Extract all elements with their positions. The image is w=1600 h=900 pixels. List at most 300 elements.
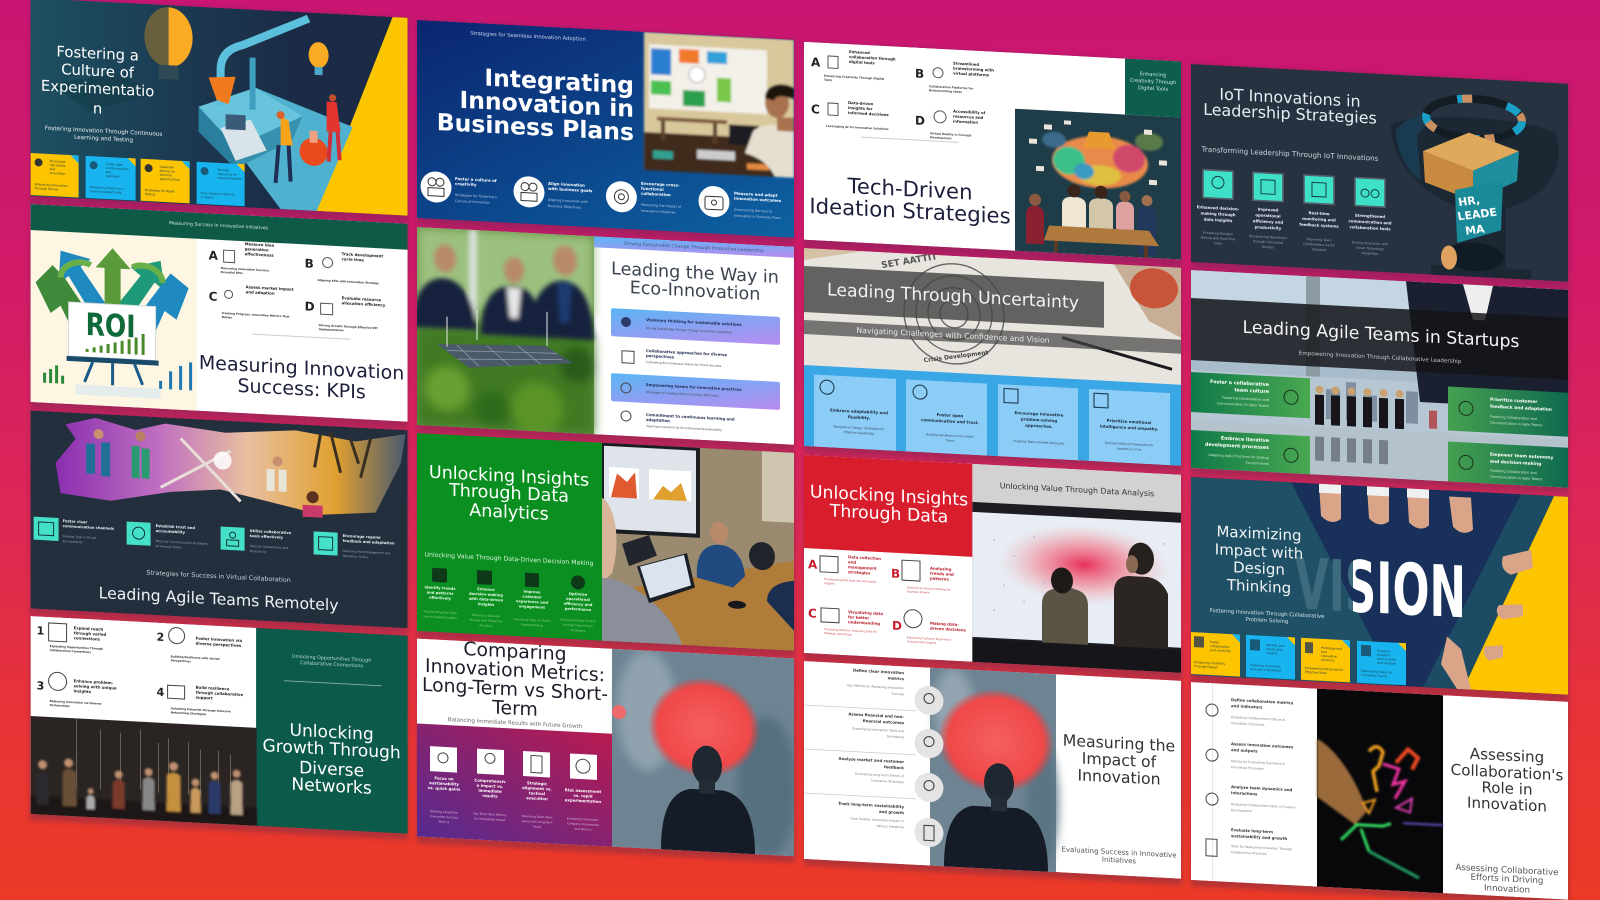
KPI grid: Evaluate resource [342, 295, 382, 302]
blue section with cards: communication and trust. [921, 417, 980, 425]
items grid: Tools [824, 78, 833, 82]
slide: Maximizing Impact with Design Thinking [1191, 477, 1568, 695]
feature cards: Encourage [50, 159, 66, 164]
icon columns: Strategies [571, 628, 586, 633]
icons row: with business goals [548, 186, 593, 193]
title band: Empowering Innovation Through Collaborative Leadership [1299, 351, 1462, 365]
feature cards: risk-taking [50, 163, 66, 168]
list cards: Empowering teams for innovative practices [646, 382, 742, 392]
numbered items: through varied [74, 630, 107, 637]
items grid: informed decisions [848, 110, 889, 117]
KPI grid: B [305, 256, 314, 271]
feature cards: and mindset [1377, 661, 1397, 666]
numbered items: Networking Strategies [171, 710, 207, 716]
list of metrics: metrics [888, 675, 905, 681]
icon row: productivity [1255, 224, 1282, 231]
comparison columns: Risk assessment [565, 787, 601, 794]
items grid [811, 47, 994, 145]
data topics: trends and [930, 571, 954, 577]
data topics: Business Growth [907, 589, 930, 595]
comparison columns: Company Frameworks [567, 821, 600, 827]
comparison columns: results [482, 793, 498, 799]
vertical list: Tools for Measuring Innovation Through [1230, 844, 1292, 851]
feature cards: Prototype and [1321, 646, 1342, 651]
blue section with cards: Prioritize emotional [1107, 418, 1152, 425]
list of metrics: and growth [879, 809, 904, 815]
comparison columns: sustainability [429, 780, 459, 787]
icon tiles: Foster clear [63, 519, 87, 524]
green callouts: Environments [1246, 461, 1269, 466]
title: IoT Innovations in [1219, 84, 1361, 111]
icon columns: Optimize [569, 592, 588, 597]
title: Impact of [1082, 749, 1157, 771]
blue section with cards: Times [945, 438, 955, 443]
data topics: Analyzing [930, 566, 952, 572]
title band: Leading Agile Teams in Startups [1243, 318, 1519, 352]
numbered items: Expanding Opportunities Through [50, 644, 103, 651]
icon row: Enhanced decision- [1197, 204, 1240, 212]
comparison columns: alignment vs. [522, 785, 552, 792]
icon tiles: for Remote Teams [156, 544, 182, 549]
title: Leading the Way in [611, 259, 779, 288]
title: Innovation in [459, 86, 634, 123]
list of metrics: Quantifying Innovation: Tools and [852, 727, 904, 733]
photo: neon shapes on black [1317, 689, 1443, 893]
numbered items: Expand reach [74, 625, 104, 632]
icon row: Strengthened [1355, 213, 1385, 219]
KPI grid: and adoption [246, 289, 275, 296]
icon row: Data [1214, 241, 1222, 246]
items grid: Brainstorming Ideas [929, 88, 962, 94]
slide: Leading Through Uncertainty [804, 245, 1181, 466]
numbered items: Collaborative Connections [50, 648, 91, 654]
image: collaborating figures in wave mask [56, 416, 406, 522]
comparison columns: and Metrics [575, 827, 592, 832]
list cards: Commitment to continuous learning and [646, 412, 735, 422]
icons row: Align innovation [548, 181, 585, 188]
gradient panel background [417, 724, 612, 847]
list of metrics: Analyze market and customer [838, 756, 904, 764]
list of metrics: Key Metrics for Assessing Innovation [847, 683, 904, 690]
KPI grid: Driving Growth Through Effective KPI [319, 323, 378, 330]
list of metrics: feedback [884, 764, 904, 770]
KPI grid: Measure idea [245, 241, 274, 248]
icon row: feedback systems [1299, 222, 1339, 229]
list of metrics: Success [892, 692, 904, 696]
icons row: Encourage cross- [641, 181, 680, 188]
numbered items: diverse perspectives [196, 641, 242, 648]
subtitle: Unlocking Value Through Data-Driven Decision Making [425, 551, 594, 567]
vertical list: Define collaboration metrics [1231, 697, 1294, 705]
title: Innovation Metrics: [425, 656, 605, 686]
slide: Assessing Collaboration's Role in Innovation [1191, 682, 1568, 900]
blue section with cards: Leaders in Crisis [1117, 446, 1142, 452]
photo: man before red sphere [930, 668, 1058, 872]
numbered items: Balancing Innovation via Diverse [50, 699, 102, 706]
header strip [594, 236, 794, 258]
title: Fostering a [56, 43, 139, 65]
title: Unlocking Insights [429, 463, 589, 491]
comparison columns: Gains with Long-Term [522, 819, 553, 825]
header band: Measuring Success in Innovative Initiatives [169, 220, 269, 231]
feature cards: Embracing Innovation [35, 182, 68, 188]
comparison columns: Balancing Short-Term [522, 814, 553, 820]
icons row: Business Objectives [548, 204, 581, 210]
numbered items: Enhance problem- [74, 678, 114, 685]
header band: Unlocking Value Through Data Analysis [1000, 481, 1154, 498]
slide: Leading the Way in Eco-Innovation [413, 227, 794, 448]
feature cards: Provide [218, 168, 229, 172]
green panel: Diverse [299, 758, 364, 781]
title: Comparing [463, 639, 567, 665]
title: Collaboration's [1451, 761, 1563, 785]
numbered items: Unlocking Potential Through Inclusive [171, 706, 231, 713]
icon columns: into Actionable Insights [423, 614, 457, 620]
photo: meeting room with dashboards [602, 443, 794, 651]
feature cards: feedback [106, 174, 120, 179]
data topics: management [848, 564, 877, 571]
icon row: Streamlining Operations [1249, 234, 1287, 240]
icon tiles: Productivity [250, 549, 267, 554]
list of metrics [804, 665, 944, 848]
feature cards: resources for [218, 172, 238, 177]
vertical list: Assess innovation outcomes [1231, 741, 1294, 749]
subtitle: Innovation [1484, 883, 1530, 896]
icon row: efficiency and [1253, 218, 1283, 225]
numbered items: Partnerships [50, 703, 70, 708]
data topics [808, 552, 966, 647]
icon row: through Connected [1253, 239, 1283, 245]
data topics: B [891, 567, 900, 581]
blue section with cards: Building Resilience in Uncertain [926, 432, 974, 439]
icon tiles: feedback and adaptation [343, 539, 395, 546]
icon row: Improving Team [1307, 237, 1331, 242]
blue section with cards: Encourage innovative [1015, 410, 1064, 418]
slide: Leading Agile Teams in Startups [1191, 270, 1568, 488]
feature cards: Enhancing Creativity [1194, 660, 1225, 666]
icon columns: through Data-Driven [563, 623, 593, 628]
list of metrics: Assess financial and non- [848, 711, 904, 719]
red title panel: Through Data [829, 501, 948, 528]
blue section with cards: Foster open [937, 412, 964, 418]
blue section with cards: Embrace adaptability and [830, 407, 888, 415]
comparison columns: Innovation Success [430, 814, 458, 820]
data topics: Enhancing Customer Experience [907, 635, 951, 642]
feature cards [1191, 632, 1406, 685]
list cards: adaptation [646, 417, 670, 423]
KPI grid: effectiveness [245, 251, 274, 258]
icons row: Foster a culture of [455, 176, 497, 183]
data topics: Making data- [930, 621, 959, 627]
green callouts: Adapting Agile Practices for Startup [1209, 453, 1269, 460]
data topics: Transforming Raw Data into Actionable [823, 577, 877, 584]
icon columns: Transforming Raw Data [422, 609, 457, 615]
trophy image: HR, [1457, 194, 1481, 209]
items grid: Virtual Reality in Concept [930, 131, 972, 138]
blue section with cards: Decision-Making Frameworks for [1105, 441, 1154, 447]
items grid: Enhancing Creativity Through Digital [824, 74, 884, 81]
feature cards: and User Experience [1250, 667, 1281, 673]
feature cards: insights [1266, 651, 1278, 656]
green callouts: Prioritize customer [1490, 397, 1538, 405]
items grid: insights for [848, 105, 873, 111]
slide: IoT Innovations in Leadership Strategies [1191, 64, 1568, 282]
list cards: Driving Sustainable Change Through Innovative Leadership [646, 326, 732, 335]
title: Measuring Innovation [199, 352, 404, 385]
green panel [256, 628, 408, 834]
header strip: Driving Sustainable Change Through Innovative Leadership [624, 241, 764, 254]
comparison columns: Key Short-Term Metrics [473, 811, 507, 817]
icons row: Measure and adapt [734, 191, 778, 198]
title: Thinking [1226, 576, 1291, 597]
icon row: collaboration tools [1349, 224, 1391, 231]
list of metrics: Define clear innovation [853, 668, 904, 675]
feature cards: in Teams [201, 195, 214, 200]
data topics: Data collection [848, 554, 881, 561]
green panel: Unlocking Opportunities Through [292, 654, 371, 664]
feature cards: Through Failure [34, 186, 58, 191]
comparison columns: Focus on [434, 775, 454, 781]
feature cards [31, 153, 245, 206]
numbered items: Building Resilience with Varied [171, 654, 220, 661]
green callouts: Communication in Agile Teams [1490, 421, 1542, 427]
icons row: Culture of Innovation [455, 199, 490, 205]
feature cards: Embracing Failure as a [90, 185, 124, 191]
comparison columns: e impact vs. [477, 783, 504, 789]
icon tiles: Fostering Team Engagement and [343, 549, 390, 555]
icons row: Aligning Innovation with [548, 198, 588, 204]
slide: Leading Agile Teams Remotely [31, 410, 408, 628]
red title panel [804, 455, 972, 557]
comparison columns: immediate [478, 788, 502, 794]
KPI grid: generation [245, 246, 269, 252]
vertical list: Innovation Outcomes [1231, 721, 1264, 727]
title: Ideation Strategies [809, 194, 1011, 230]
title banner: Leading Through Uncertainty [827, 280, 1079, 313]
blue section with cards [804, 365, 1181, 466]
side tag [1125, 59, 1181, 117]
icon row: Making with Real-Time [1201, 236, 1235, 241]
photo: paper with spiral [804, 245, 1181, 378]
numbered items: connections [74, 635, 101, 642]
photo: man before red sphere [612, 649, 797, 858]
KPI grid: Assess market impact [246, 284, 294, 292]
title: Through Data [448, 481, 569, 507]
header band [972, 464, 1181, 513]
green callouts: team culture [1234, 387, 1270, 395]
photo: team under idea cloud [1015, 109, 1181, 259]
feature cards: innovation [50, 171, 66, 176]
icon tiles: accountability [156, 529, 186, 535]
feature cards: Foster open [106, 162, 123, 167]
icon row: Driving Innovation with [1352, 240, 1388, 246]
feature cards: needs and [1266, 647, 1282, 652]
green callouts: Embrace iterative [1221, 436, 1270, 444]
numbered items: insights [74, 688, 92, 694]
list of metrics: Various Industries [876, 824, 904, 829]
subtitle: Initiatives [1102, 856, 1136, 865]
feature cards: Through Design [1193, 664, 1218, 669]
subtitle band: Navigating Challenges with Confidence and Vision [856, 326, 1050, 345]
trophy image [1391, 94, 1559, 281]
numbered items: Foster innovation via [196, 636, 242, 643]
icon row: Integration [1361, 251, 1379, 256]
icon columns: Enhance [477, 587, 495, 592]
icon row: communication and [1348, 218, 1392, 226]
green panel: Collaborative Connections [300, 660, 364, 669]
data topics: understanding [848, 619, 880, 626]
comparison columns: vs. rapid [573, 793, 593, 799]
side tag: Creativity Through [1130, 78, 1176, 86]
green callouts: Fostering Collaboration and [1490, 469, 1537, 475]
list cards [611, 308, 780, 435]
icon tiles: Utilize collaborative [250, 529, 292, 535]
ROI illustration: ROI [86, 307, 136, 345]
KPI grid: cycle time [342, 256, 364, 262]
icon row: Solutions [1312, 247, 1326, 252]
subtitle: Fostering Innovation Through Collaborative [1210, 608, 1324, 620]
green callouts: Communication in Agile Teams [1217, 401, 1269, 408]
photo: hands around vision [1295, 482, 1568, 695]
red title panel: Unlocking Insights [810, 482, 968, 511]
blue section with cards: Navigating Change: Strategies for [833, 425, 885, 431]
list of metrics: Case Studies: Innovation Impact in [850, 816, 904, 823]
data topics: Data-Driven Decision Making for [907, 585, 951, 592]
side tag: Digital Tools [1138, 85, 1168, 93]
title: Business Plans [437, 108, 634, 146]
title: Measuring the [1063, 731, 1175, 755]
KPI grid: allocation efficiency [342, 300, 386, 308]
vertical list: interactions [1231, 790, 1258, 797]
data topics: A [808, 557, 818, 572]
blue section with cards: approaches. [1025, 423, 1053, 429]
title: Success: KPIs [237, 375, 366, 404]
data topics: Insights [824, 581, 835, 586]
numbered items: Build resilience [196, 685, 230, 691]
icons row: Strategies for Fostering a [455, 193, 497, 199]
green callouts: Empower team autonomy [1490, 452, 1553, 461]
blue section with cards: Effective Leadership [844, 430, 874, 436]
icon tiles: Tools for Collaboration and [249, 544, 288, 550]
list cards: Collaborative approaches for diverse [646, 348, 727, 357]
feature cards: Identify user [1266, 643, 1286, 648]
icon columns: decision-making [469, 592, 503, 598]
items grid: C [811, 102, 820, 117]
icon tiles: tools effectively [250, 534, 284, 540]
numbered items: support [196, 695, 213, 701]
photo: man at whiteboard [644, 32, 794, 178]
icons row: Innovation in Business Plans [734, 214, 781, 220]
feature cards: collaboration [1210, 644, 1230, 649]
title: Experimentatio [41, 78, 154, 100]
vertical list: Analyze team dynamics and [1231, 784, 1292, 792]
comparison columns: for Immediate Impact [474, 817, 507, 822]
data topics: C [808, 606, 817, 621]
title: Leading Agile Teams Remotely [99, 583, 339, 615]
icons row: collaboration [641, 191, 671, 197]
items grid: B [915, 67, 924, 81]
icon columns: customer [522, 595, 542, 600]
blue section with cards: Inspiring Teams Amidst Ambiguity [1013, 439, 1065, 446]
title: Tech-Driven [846, 174, 973, 206]
list cards: Inspiring Innovation for Environmental Sustainability [646, 424, 722, 432]
icon row: making through [1200, 210, 1236, 217]
green callouts: and decision-making [1490, 459, 1541, 467]
icon columns: effectively [429, 596, 451, 601]
icon columns: Driving Business Growth [560, 618, 596, 623]
green callouts: Fostering Collaboration and [1490, 415, 1537, 421]
list of metrics: Track long-term sustainability [838, 801, 904, 809]
items grid: Data-driven [848, 100, 874, 106]
items grid: virtual platforms [953, 71, 990, 77]
data topics: and [848, 559, 856, 565]
vertical list: Analyzing Collaboration's Effects in [1231, 715, 1285, 722]
icon row: operational [1255, 212, 1281, 219]
slide: Measuring the Impact of Innovation [804, 661, 1181, 879]
feature cards: failures as [160, 169, 175, 174]
header band [31, 204, 408, 250]
feature cards: Testing [144, 192, 155, 197]
feature cards: innovative [1321, 654, 1337, 659]
icon columns: Identify trends [425, 585, 456, 591]
icon row: Real-time [1308, 210, 1330, 216]
green callouts: feedback and adaptation [1490, 404, 1552, 413]
icons row: Overcoming Barriers to [734, 208, 772, 214]
icon tiles: Encourage regular [343, 534, 381, 540]
icon tiles: Effective Communication Strategies [156, 539, 208, 546]
icon columns: Improve [523, 590, 541, 595]
slide: Integrating Innovation in Business Plans [417, 20, 794, 238]
title: Eco-Innovation [630, 278, 760, 305]
vertical list: Analyzing Collaboration's Role in Creative [1231, 802, 1296, 809]
comparison columns: Evaluating Innovation: [567, 816, 599, 822]
items grid: Collaborative Platforms for [929, 84, 974, 91]
data topics: strategies [848, 569, 871, 576]
list of metrics: Techniques [886, 734, 904, 739]
icon row: Smart Technology [1356, 246, 1384, 251]
vertical list: and outputs [1231, 747, 1258, 754]
illustration: lab scene [51, 0, 408, 216]
comparison columns: vs. quick gains [428, 785, 461, 792]
side tag: Enhancing [1140, 71, 1166, 79]
feature cards: Maximizing Value for [1361, 669, 1393, 675]
feature cards: communication [106, 166, 129, 171]
vertical list: Evaluate long-term [1231, 827, 1273, 834]
items grid: brainstorming with [953, 66, 994, 73]
comparison columns: Metrics [439, 820, 450, 824]
subtitle: Assessing Collaborative [1455, 863, 1559, 878]
list cards: Visionary thinking for sustainable solutions [646, 317, 742, 327]
title: Assessing [1470, 745, 1544, 767]
data topics: Strategic Advantage [824, 631, 852, 637]
vertical list: Collaborative Practices [1231, 850, 1267, 856]
title: Innovation [1077, 765, 1161, 789]
vertical list: Metrics for Evaluating Teamwork in [1231, 759, 1285, 766]
photo: men viewing data wall [972, 502, 1181, 673]
feature cards: and creativity [1210, 648, 1231, 653]
KPI grid: D [305, 299, 315, 314]
numbered items: 4 [157, 686, 165, 699]
icons row: Innovative Initiatives [641, 209, 676, 215]
subtitle: Balancing Immediate Results with Future Growth [448, 717, 583, 730]
slide: Fostering a Culture of Experimentation [31, 0, 408, 216]
KPI grid: C [209, 289, 218, 304]
feature cards: Foster [1210, 640, 1220, 645]
KPI grid: Track development [342, 251, 383, 258]
feature cards: learning [160, 173, 172, 177]
title banner [804, 266, 1104, 328]
subtitle: Transforming Leadership Through IoT Innovations [1201, 145, 1379, 163]
